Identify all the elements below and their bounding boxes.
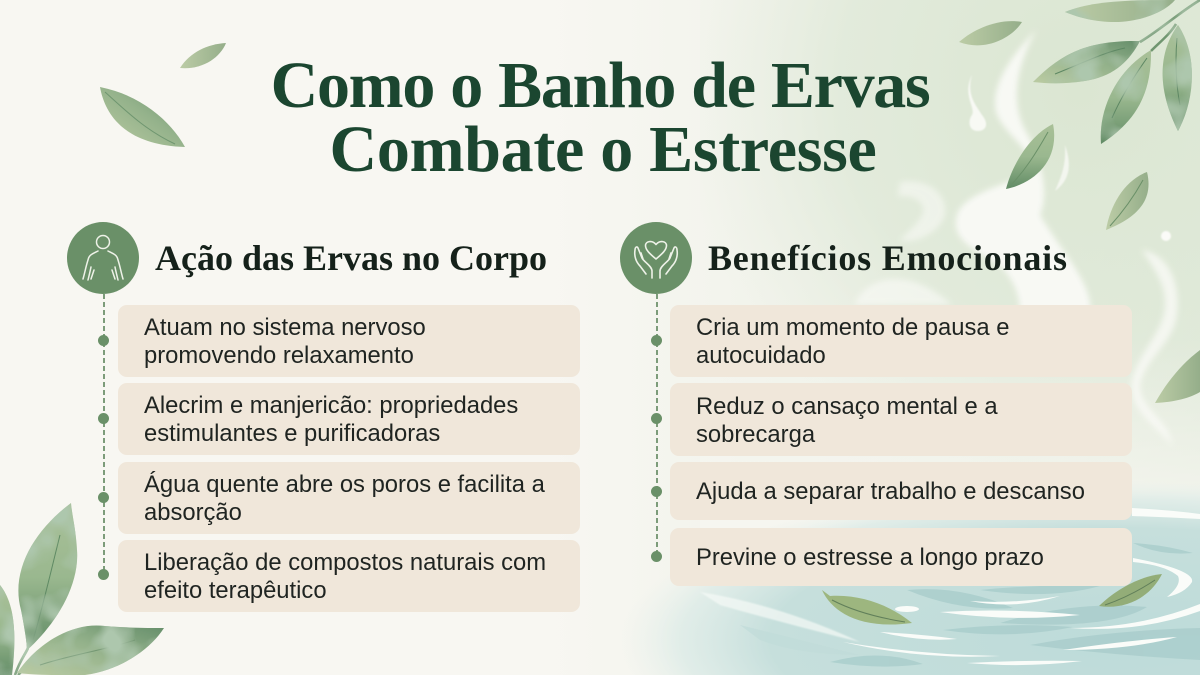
card 2: Alecrim e manjericão: propriedades (144, 392, 518, 419)
card 3 (118, 462, 580, 534)
card 4 (670, 528, 1132, 586)
card 1: Atuam no sistema nervoso (144, 314, 426, 341)
panel: Ação das Ervas no Corpo (67, 222, 580, 612)
card 3: Ajuda a separar trabalho e descanso (696, 478, 1085, 505)
floating leaves top right (959, 21, 1200, 403)
heading: Ação das Ervas no Corpo (155, 238, 547, 278)
card 1 (670, 305, 1132, 377)
card 3: absorção (144, 499, 242, 526)
card 1: autocuidado (696, 342, 826, 369)
card 3: Água quente abre os poros e facilita a (144, 471, 545, 498)
panel: Benefícios Emocionais (620, 222, 1132, 586)
card 4: Previne o estresse a longo prazo (696, 544, 1044, 571)
title: Como o Banho de Ervas (271, 49, 929, 122)
steam (855, 30, 1178, 445)
card 4: Liberação de compostos naturais com (144, 549, 546, 576)
card 2: Reduz o cansaço mental e a (696, 392, 998, 420)
water ripples (620, 480, 1200, 675)
card 4: efeito terapêutico (144, 577, 327, 604)
title: Combate o Estresse (330, 113, 876, 186)
leaves on water (822, 574, 1162, 625)
card 2: estimulantes e purificadoras (144, 420, 440, 447)
card 2 (670, 383, 1132, 456)
card 1 (118, 305, 580, 377)
card 1: promovendo relaxamento (144, 342, 414, 369)
card 2: sobrecarga (696, 420, 815, 448)
icon: hands holding heart (620, 222, 692, 294)
timeline (651, 294, 662, 562)
leaf branch top right (1033, 0, 1200, 144)
card 1: Cria um momento de pausa e (696, 314, 1010, 341)
heading: Benefícios Emocionais (708, 238, 1068, 278)
floating leaves top left (100, 43, 226, 147)
card 2 (118, 383, 580, 455)
icon: human body (67, 222, 139, 294)
title (271, 49, 930, 186)
card 3 (670, 462, 1132, 520)
leaves bottom left (0, 503, 164, 675)
card 4 (118, 540, 580, 612)
timeline (98, 294, 109, 580)
